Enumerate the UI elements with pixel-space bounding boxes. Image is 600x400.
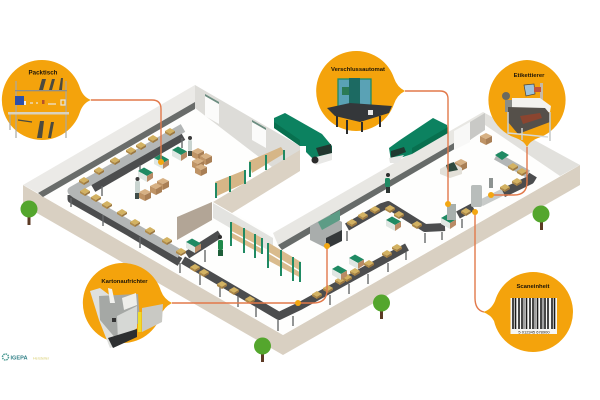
callout: Etikettierer bbox=[488, 60, 566, 147]
back walls bbox=[23, 85, 580, 253]
callout: Verschlussautomat: Verschlussautomat bbox=[331, 67, 385, 73]
logo: IGEPA: IGEPA bbox=[10, 356, 28, 362]
storage racks bbox=[215, 147, 301, 282]
forklift bbox=[440, 162, 462, 178]
logo: IGEPA bbox=[2, 354, 50, 362]
callout: Scaneinheit bbox=[483, 272, 573, 352]
conveyor line: front run bbox=[183, 234, 407, 331]
conveyor line: packing room bbox=[71, 128, 183, 273]
truck: right bbox=[389, 118, 448, 163]
carton stacks bbox=[139, 133, 492, 201]
callout: Packtisch: Packtisch bbox=[29, 70, 58, 76]
trees bbox=[20, 200, 550, 362]
connector dots bbox=[158, 159, 494, 306]
callout: Verschlussautomat bbox=[316, 51, 405, 134]
logo: IGEPA: Hersteller bbox=[33, 356, 50, 360]
callout: Etikettierer: Etikettierer bbox=[514, 73, 545, 79]
connector lines bbox=[91, 91, 527, 312]
callout: Packtisch bbox=[2, 60, 91, 140]
truck: left bbox=[274, 113, 332, 165]
callout: Scaneinheit: Scaneinheit bbox=[516, 284, 550, 290]
callout: Kartonaufrichter: Kartonaufrichter bbox=[101, 279, 148, 285]
machines on the line bbox=[310, 178, 493, 249]
cartons on conveyors bbox=[79, 128, 527, 304]
packing tables bbox=[138, 146, 456, 280]
workers bbox=[135, 136, 390, 256]
building floor and outer wall bbox=[23, 85, 580, 355]
conveyor line: curved section and labeller bbox=[347, 151, 533, 243]
callout: Scaneinheit: 5 012345 678900 bbox=[518, 330, 550, 334]
callout: Kartonaufrichter bbox=[83, 263, 172, 348]
